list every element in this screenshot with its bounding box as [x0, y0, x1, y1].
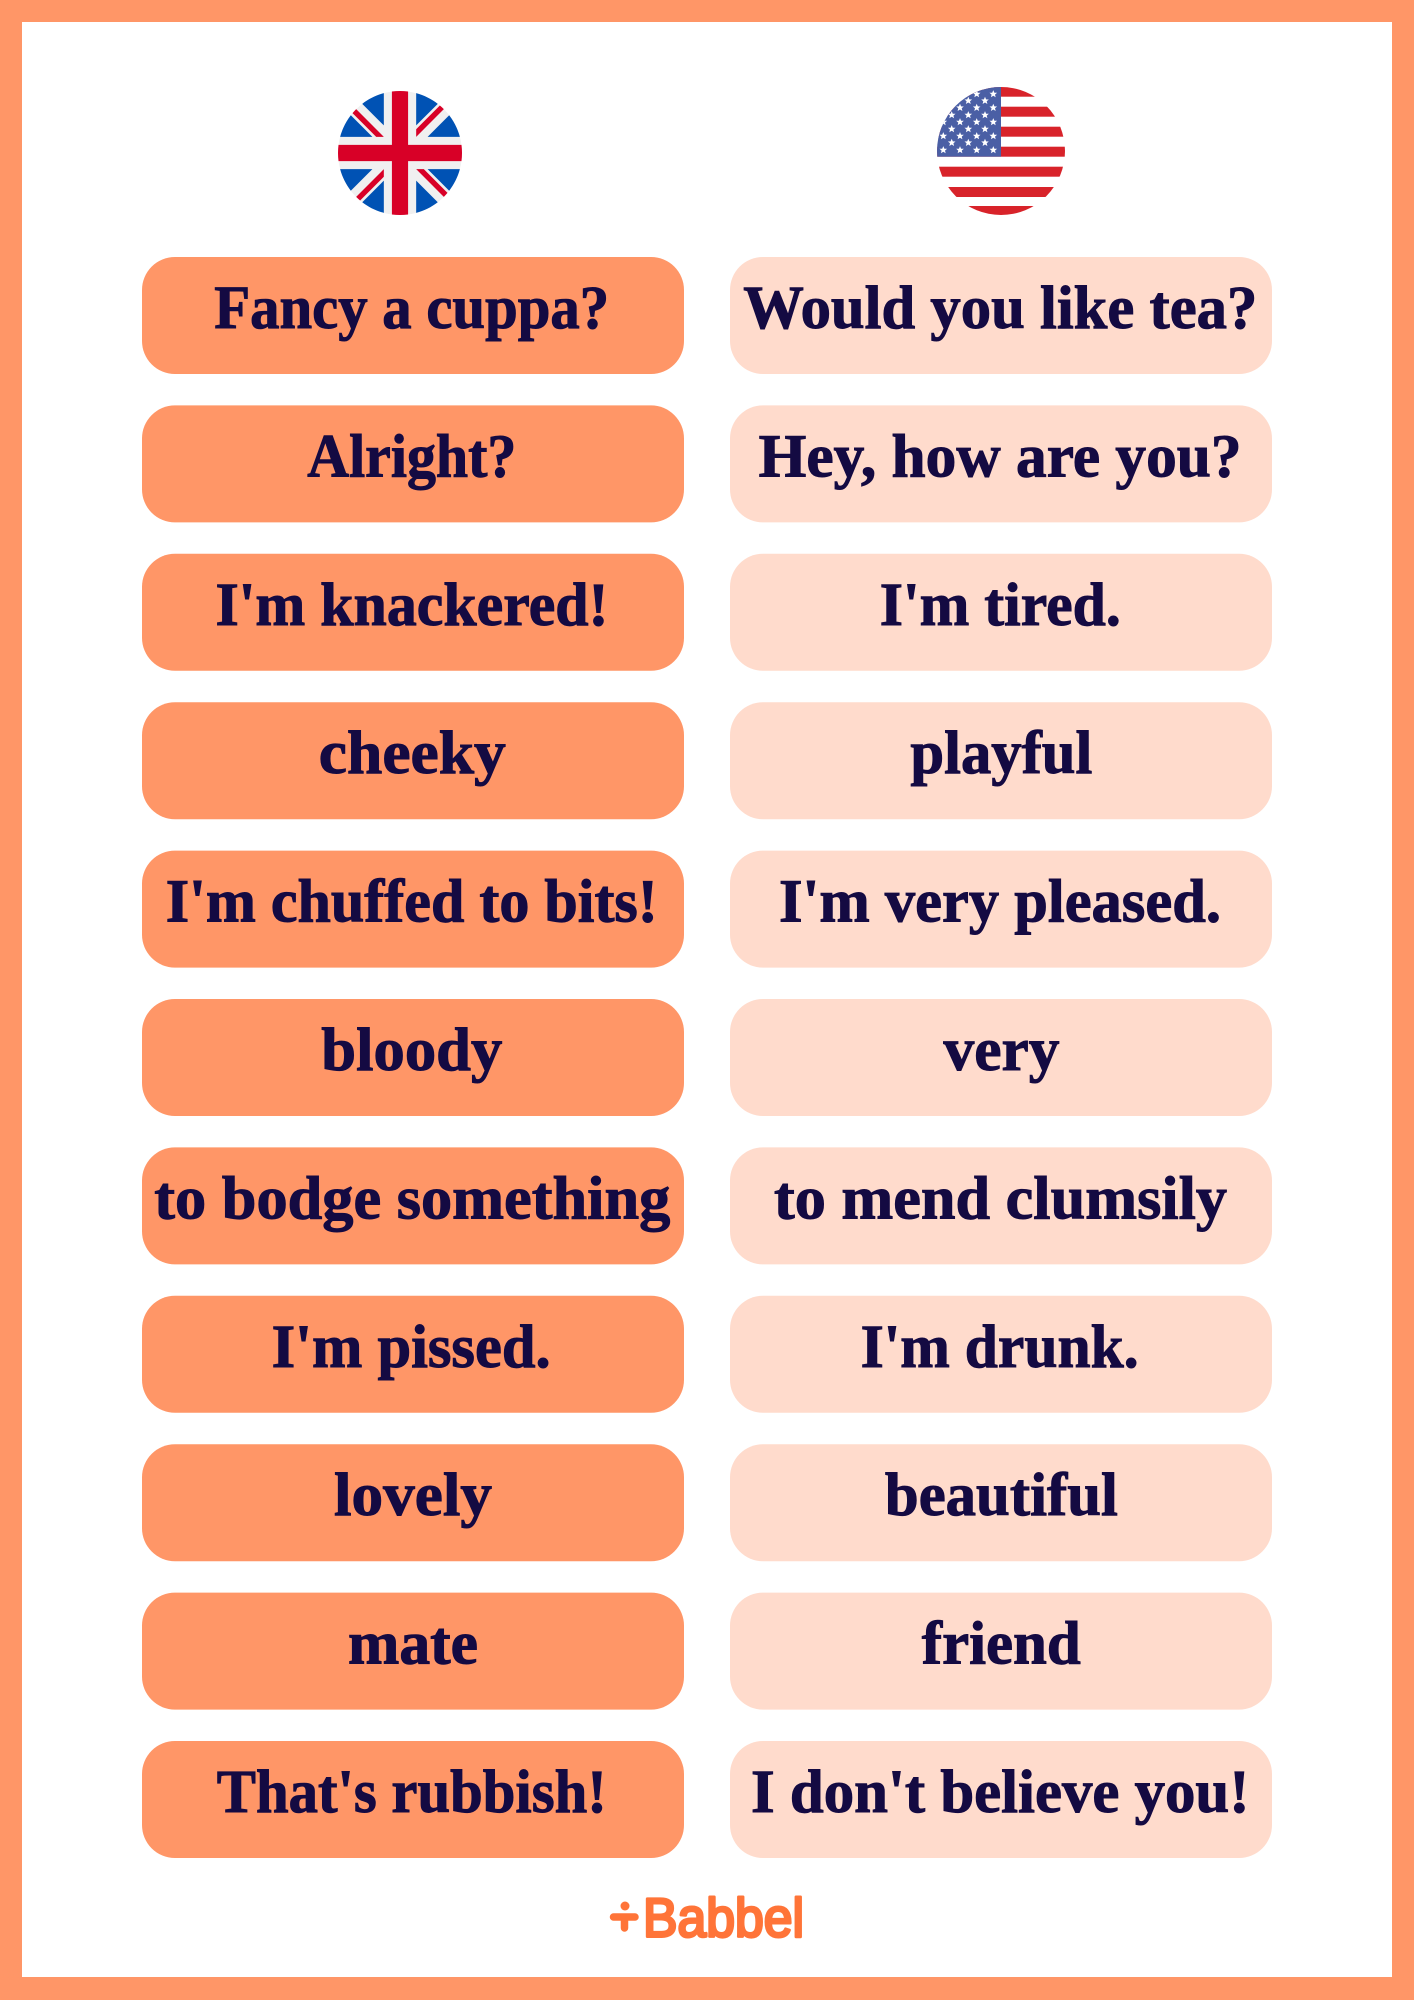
row 1 American: Would you like tea? — [730, 257, 1272, 374]
row 11 British: That's rubbish! — [142, 1741, 684, 1858]
row 5 British: I'm chuffed to bits! — [142, 851, 684, 968]
row 6 American: very: very — [944, 1017, 1060, 1084]
icon: US flag — [937, 87, 1065, 215]
row 3 American: I'm tired. — [730, 554, 1272, 671]
row 8 British: I'm pissed.: I'm pissed. — [272, 1314, 551, 1381]
row 10 American: friend: friend — [922, 1611, 1081, 1678]
row 2 British: Alright?: Alright? — [307, 423, 516, 490]
row 7 American: to mend clumsily: to mend clumsily — [774, 1165, 1227, 1232]
row 11 American: I don't believe you!: I don't believe you! — [751, 1759, 1250, 1826]
row 2 American: Hey, how are you? — [730, 405, 1272, 522]
row 10 American: friend — [730, 1593, 1272, 1710]
row 9 British: lovely: lovely — [334, 1462, 492, 1529]
row 8 American: I'm drunk.: I'm drunk. — [861, 1314, 1139, 1381]
row 4 American: playful — [730, 702, 1272, 819]
row 1 British: Fancy a cuppa?: Fancy a cuppa? — [214, 275, 609, 342]
row 3 British: I'm knackered! — [142, 554, 684, 671]
row 4 British: cheeky: cheeky — [319, 720, 506, 787]
row 2 British: Alright? — [142, 405, 684, 522]
icon: UK flag — [338, 91, 462, 215]
row 11 British: That's rubbish!: That's rubbish! — [217, 1759, 607, 1826]
row 7 American: to mend clumsily — [730, 1147, 1272, 1264]
row 9 American: beautiful — [730, 1444, 1272, 1561]
row 2 American: Hey, how are you?: Hey, how are you? — [759, 423, 1242, 490]
row 1 American: Would you like tea?: Would you like tea? — [743, 275, 1257, 342]
row 7 British: to bodge something — [142, 1147, 684, 1264]
row 3 American: I'm tired.: I'm tired. — [880, 572, 1121, 639]
row 3 British: I'm knackered!: I'm knackered! — [216, 572, 608, 639]
row 6 American: very — [730, 999, 1272, 1116]
row 5 American: I'm very pleased. — [730, 851, 1272, 968]
row 9 American: beautiful: beautiful — [885, 1462, 1118, 1529]
row 8 British: I'm pissed. — [142, 1296, 684, 1413]
row 4 British: cheeky — [142, 702, 684, 819]
row 11 American: I don't believe you! — [730, 1741, 1272, 1858]
row 6 British: bloody — [142, 999, 684, 1116]
row 5 British: I'm chuffed to bits!: I'm chuffed to bits! — [166, 869, 658, 936]
row 1 British: Fancy a cuppa? — [142, 257, 684, 374]
row 10 British: mate: mate — [348, 1611, 478, 1678]
row 8 American: I'm drunk. — [730, 1296, 1272, 1413]
row 9 British: lovely — [142, 1444, 684, 1561]
logo: Babbel: Babbel — [643, 1886, 804, 1948]
row 6 British: bloody: bloody — [321, 1017, 502, 1084]
row 7 British: to bodge something: to bodge something — [154, 1165, 670, 1232]
row 4 American: playful: playful — [910, 720, 1092, 787]
row 5 American: I'm very pleased.: I'm very pleased. — [779, 869, 1221, 936]
row 10 British: mate — [142, 1593, 684, 1710]
